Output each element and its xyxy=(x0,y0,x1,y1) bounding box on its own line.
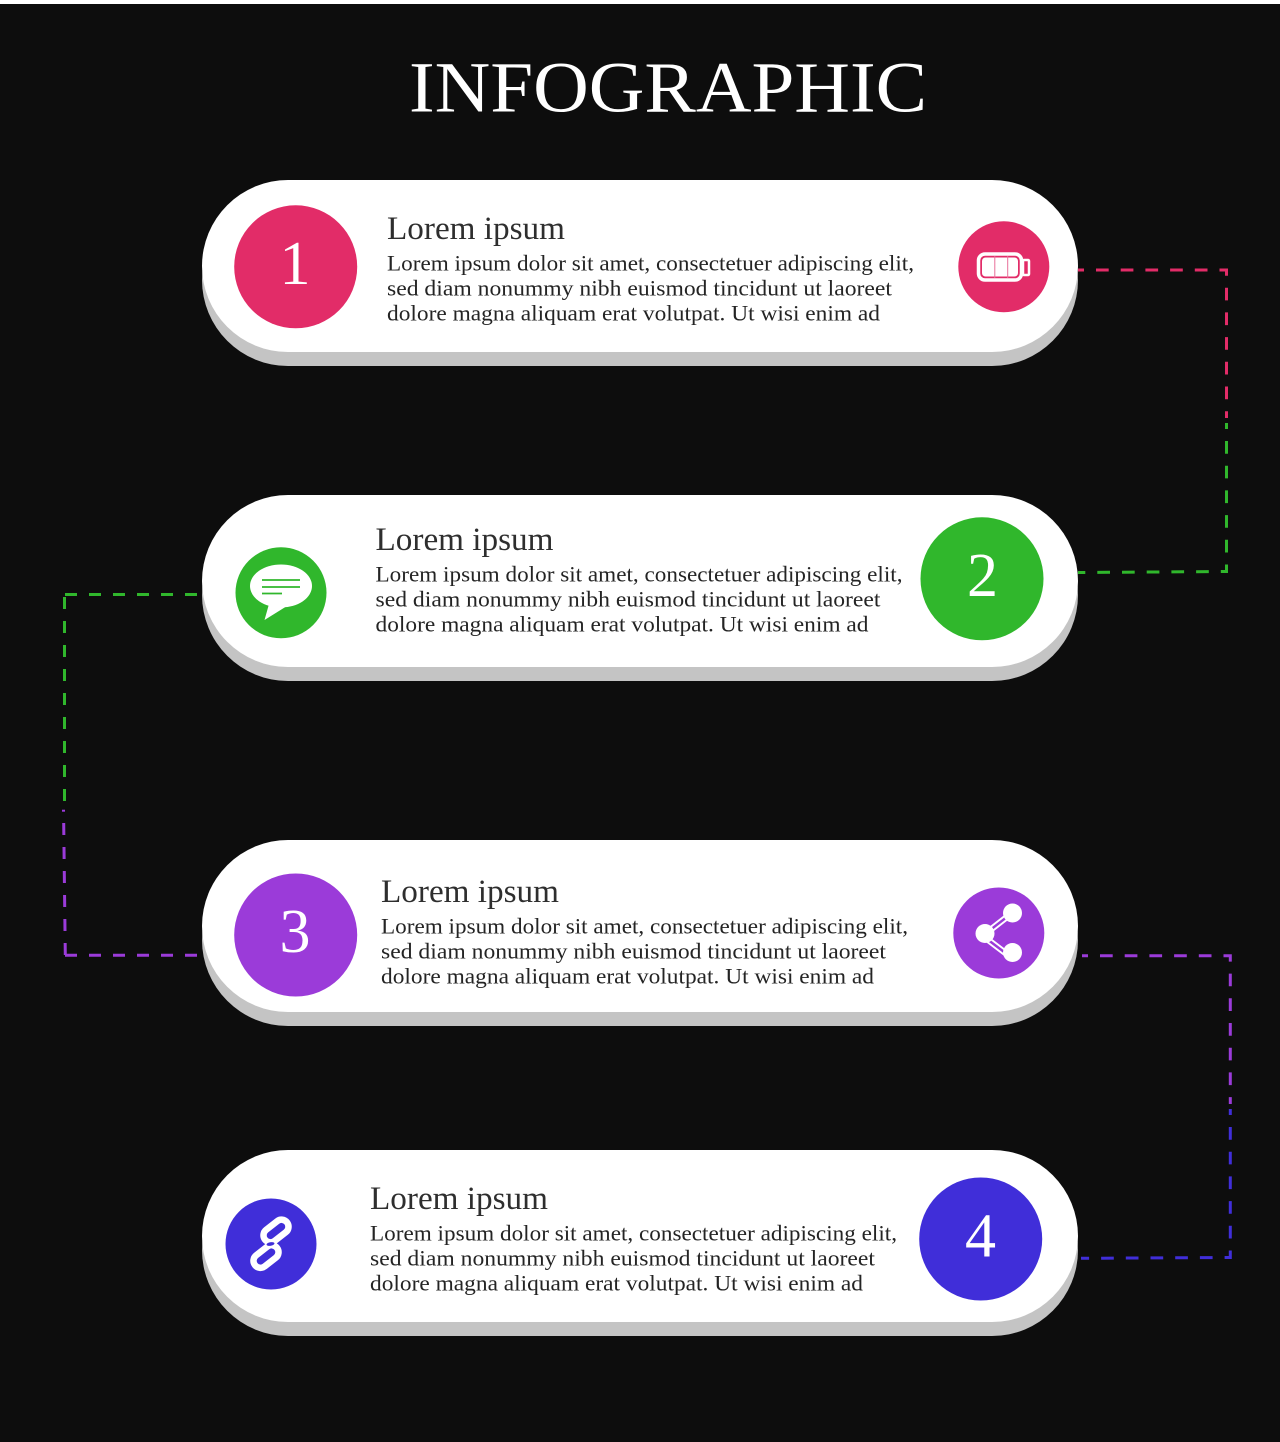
panel: card 2 xyxy=(202,495,1078,681)
connector: purple tick on left line xyxy=(62,810,65,812)
card 4 body xyxy=(202,1150,1078,1322)
connector: blue dashed line to card 4 xyxy=(1081,1109,1230,1258)
card 4 text: dolore magna aliquam erat volutpat. Ut wisi enim ad xyxy=(370,1270,863,1296)
card 2 text xyxy=(376,562,902,636)
connector: green dashed line from card 2 vertical xyxy=(63,597,66,802)
connector: purple dashed line from card 3 xyxy=(1082,956,1230,1104)
card 2 heading: Lorem ipsum xyxy=(376,522,554,558)
icon: battery xyxy=(958,221,1049,312)
card 2 text: Lorem ipsum dolor sit amet, consectetuer adipiscing elit, xyxy=(376,562,902,586)
icon: speech bubble xyxy=(236,547,326,638)
card 2 text: dolore magna aliquam erat volutpat. Ut wisi enim ad xyxy=(376,612,868,636)
card 1 text: sed diam nonummy nibh euismod tincidunt ut laoreet xyxy=(387,276,893,300)
number badge 3 xyxy=(234,874,357,996)
card 2 text: sed diam nonummy nibh euismod tincidunt ut laoreet xyxy=(376,586,881,612)
panel: card 1 xyxy=(202,180,1078,366)
connector: purple dashed line vertical to card 3 xyxy=(64,823,65,955)
connector: pink dashed line from card 1 xyxy=(1078,270,1226,418)
card 4 text: sed diam nonummy nibh euismod tincidunt ut laoreet xyxy=(370,1246,876,1270)
number badge 4: 4 xyxy=(965,1202,996,1270)
card 1 body xyxy=(202,180,1078,352)
card 3 text: Lorem ipsum dolor sit amet, consectetuer adipiscing elit, xyxy=(381,914,908,938)
card 2 body xyxy=(202,495,1078,667)
number badge 1: 1 xyxy=(280,230,310,298)
number badge 2: 2 xyxy=(967,542,998,610)
card 3 text: sed diam nonummy nibh euismod tincidunt ut laoreet xyxy=(381,938,887,964)
connector: green dashed line from card 2 horizontal xyxy=(64,593,197,596)
card 3 text: dolore magna aliquam erat volutpat. Ut wisi enim ad xyxy=(381,964,874,988)
connector: green dashed line to card 2 xyxy=(1078,423,1226,572)
number badge 2 xyxy=(920,517,1044,640)
icon: chain link xyxy=(226,1198,316,1290)
card 1 text xyxy=(387,250,914,326)
panel: card 3 xyxy=(202,840,1078,1026)
card 3 heading: Lorem ipsum xyxy=(381,874,559,910)
card 1 text: Lorem ipsum dolor sit amet, consectetuer adipiscing elit, xyxy=(387,250,914,276)
connector: purple dashed line horizontal to card 3 xyxy=(65,954,197,957)
number badge 4 xyxy=(919,1178,1042,1300)
card 4 text: Lorem ipsum dolor sit amet, consectetuer adipiscing elit, xyxy=(370,1220,897,1246)
card 1 text: dolore magna aliquam erat volutpat. Ut wisi enim ad xyxy=(387,300,880,326)
card 3 shadow xyxy=(202,854,1078,1026)
card 4 shadow xyxy=(202,1164,1078,1336)
number badge 3: 3 xyxy=(280,898,310,966)
title: INFOGRAPHIC xyxy=(409,48,927,128)
card 4 heading: Lorem ipsum xyxy=(370,1181,548,1217)
card 3 body xyxy=(202,840,1078,1012)
card 3 text xyxy=(381,914,908,988)
panel: card 4 xyxy=(202,1150,1078,1336)
number badge 1 xyxy=(234,205,357,328)
icon: share xyxy=(953,888,1044,978)
card 1 shadow xyxy=(202,194,1078,366)
card 1 heading: Lorem ipsum xyxy=(387,211,565,247)
card 2 shadow xyxy=(202,509,1078,681)
card 4 text xyxy=(370,1220,897,1296)
